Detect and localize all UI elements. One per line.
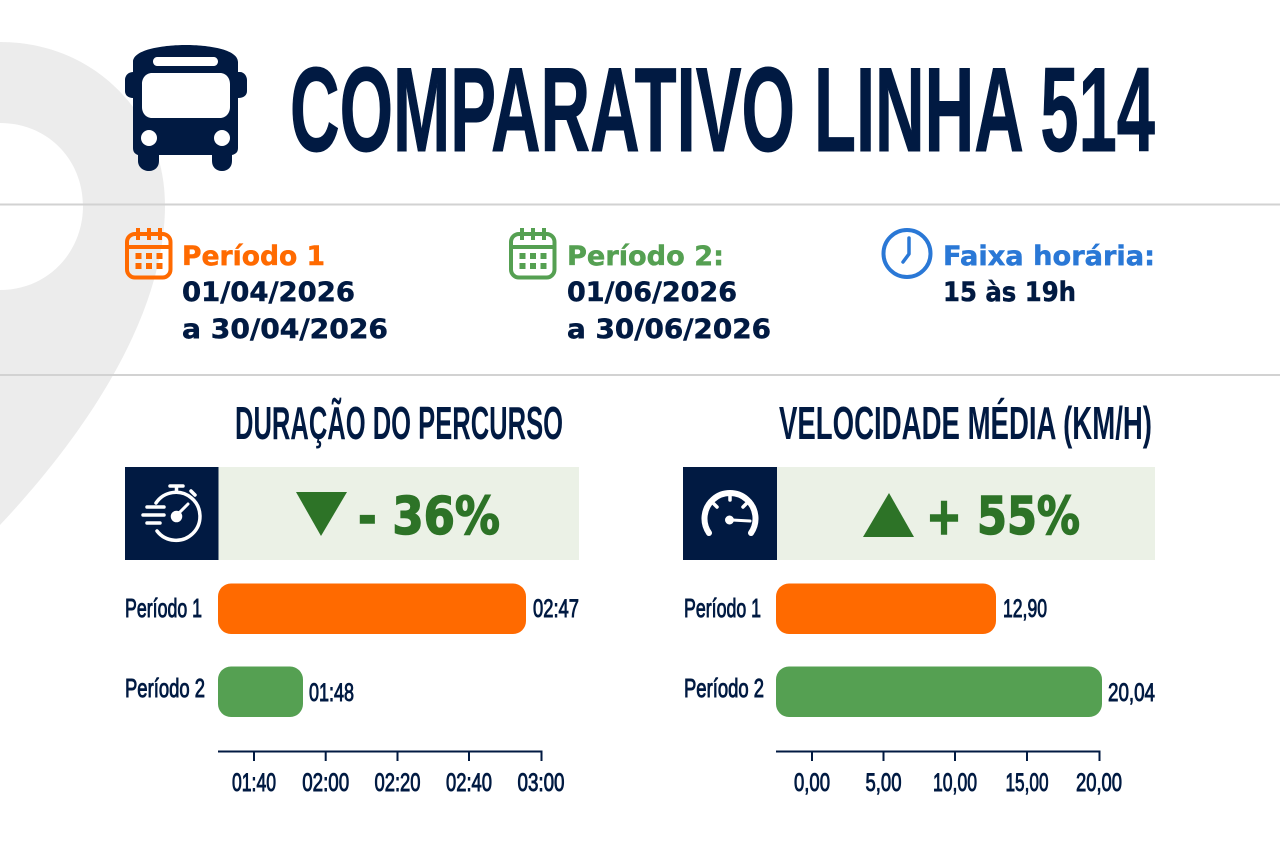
axis: 0,00 <box>794 769 830 797</box>
time range value: 15 às 19h <box>943 277 1076 308</box>
period 2 dates: 01/06/2026 <box>567 277 737 308</box>
value: 12,90 <box>1003 595 1047 623</box>
icon: speedometer <box>705 493 756 533</box>
axis: 02:00 <box>302 769 349 797</box>
period 2 dates <box>567 277 771 345</box>
value: 02:47 <box>533 595 579 623</box>
icon: bus <box>125 45 247 171</box>
bar chart: speed <box>684 584 1155 797</box>
period 1 block <box>127 228 388 345</box>
value: 20,04 <box>1108 679 1155 707</box>
row label: Período 1 <box>125 593 202 623</box>
bar chart: duration <box>125 584 579 797</box>
result value: + 55% <box>926 487 1080 547</box>
icon: stopwatch <box>143 486 200 540</box>
arrow: up triangle <box>863 493 914 537</box>
time range block <box>884 230 1155 308</box>
result banner: -36% <box>125 467 579 560</box>
value: 01:48 <box>309 679 354 707</box>
panel: route duration <box>125 397 579 797</box>
result value: - 36% <box>358 487 500 547</box>
icon: orange calendar <box>127 228 171 278</box>
row label: Período 1 <box>684 593 761 623</box>
axis: 02:40 <box>446 769 492 797</box>
arrow: down triangle <box>296 492 347 536</box>
period 2 block <box>511 228 771 345</box>
period 1 dates: a 30/04/2026 <box>182 314 388 345</box>
panel: average speed <box>683 397 1155 797</box>
row label: Período 2 <box>684 673 764 703</box>
axis <box>776 752 1122 797</box>
time range label: Faixa horária: <box>943 241 1155 272</box>
period 1 label: Período 1 <box>182 241 325 272</box>
row label: Período 2 <box>125 673 205 703</box>
bar: period 1 <box>776 584 996 634</box>
axis: 01:40 <box>232 769 276 797</box>
axis: 15,00 <box>1006 769 1048 797</box>
axis: 02:20 <box>374 769 420 797</box>
icon: green calendar <box>511 228 555 278</box>
heading: route duration: DURAÇÃO DO PERCURSO <box>235 397 563 449</box>
period 2 label: Período 2: <box>567 241 724 272</box>
axis: 03:00 <box>518 769 564 797</box>
bar: period 2 <box>218 666 303 717</box>
axis: 20,00 <box>1076 769 1122 797</box>
bar: period 2 <box>776 666 1102 717</box>
axis <box>218 752 564 797</box>
icon: blue clock <box>884 230 930 277</box>
period 1 dates: 01/04/2026 <box>182 277 355 308</box>
bar: period 1 <box>218 584 526 634</box>
axis: 5,00 <box>866 769 902 797</box>
axis: 10,00 <box>933 769 977 797</box>
period 1 dates <box>182 277 388 345</box>
result banner: +55% <box>683 467 1155 560</box>
period 2 dates: a 30/06/2026 <box>567 314 771 345</box>
